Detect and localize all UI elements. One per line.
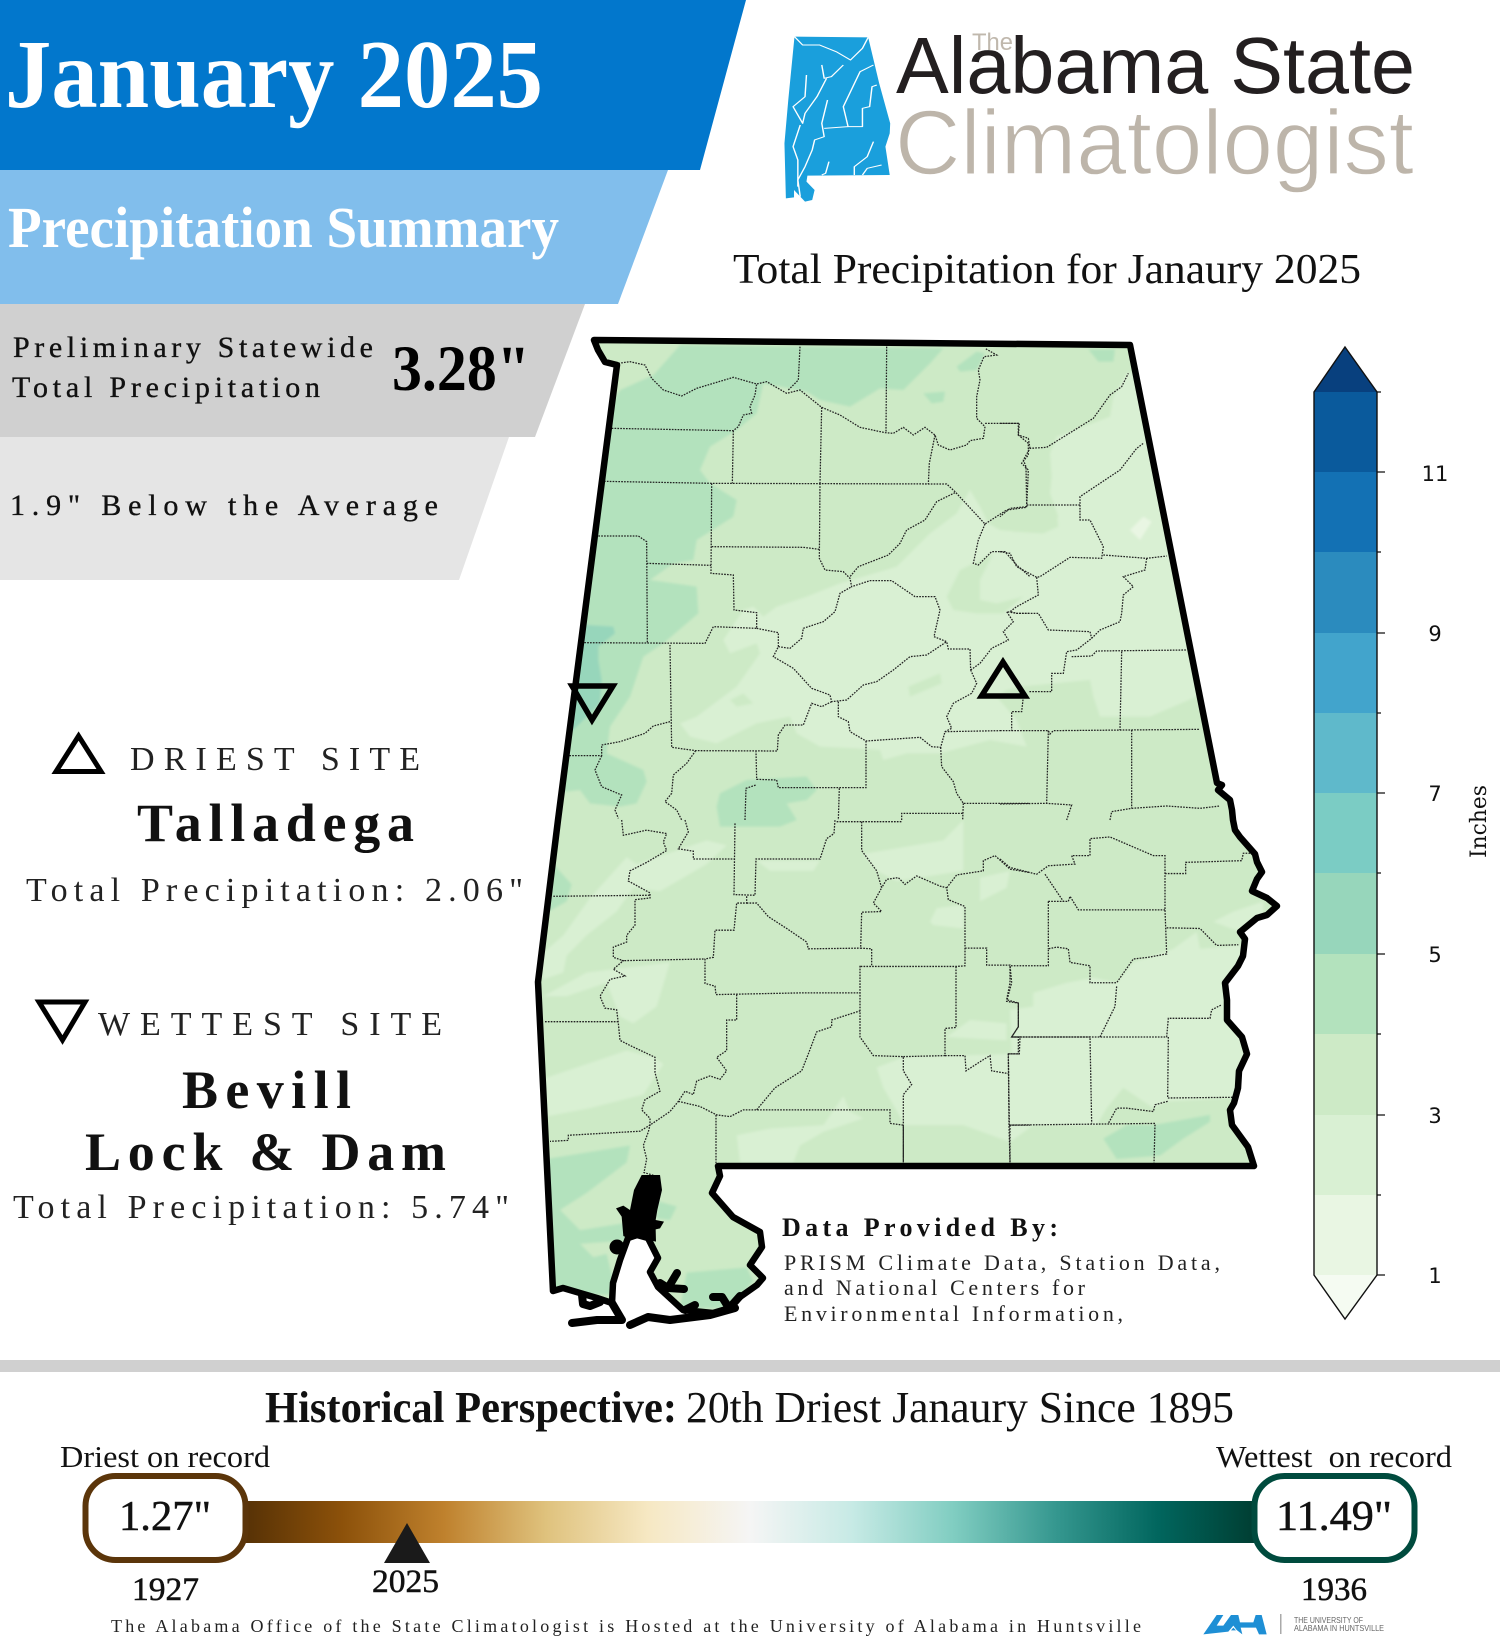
UAH mark	[1203, 1615, 1267, 1634]
colorbar tick labels: 1	[1428, 1264, 1442, 1288]
data sources text: Environmental Information,	[784, 1301, 1123, 1326]
2025 label: 2025	[372, 1564, 439, 1600]
driest site name: Talladega	[137, 793, 414, 853]
data sources heading: Data Provided By:	[782, 1213, 1058, 1242]
colorbar tick labels	[1422, 462, 1448, 1288]
wettest value: 11.49"	[1276, 1494, 1392, 1540]
precipitation contours	[530, 345, 1270, 1308]
statewide label	[12, 331, 373, 404]
data sources text	[784, 1250, 1220, 1326]
UAH wordmark: THE UNIVERSITY OF	[1294, 1616, 1363, 1625]
driest site value: Total Precipitation: 2.06"	[26, 872, 523, 909]
panel: header bands	[0, 0, 746, 580]
1936 label: 1936	[1301, 1572, 1367, 1608]
logo text: The: The	[972, 29, 1013, 56]
logo	[784, 21, 1415, 202]
wettest record label: Wettest on record	[1216, 1439, 1453, 1474]
colorbar tick labels: 5	[1428, 943, 1442, 967]
below average text: 1.9" Below the Average	[10, 489, 438, 522]
logo icon: Alabama rivers	[784, 37, 890, 202]
wettest box	[1254, 1476, 1414, 1560]
county boundaries	[545, 347, 1250, 1175]
driest record label: Driest on record	[60, 1439, 271, 1474]
Mobile Bay and Gulf coast	[572, 1175, 740, 1325]
driest box	[86, 1476, 246, 1560]
colorbar tick labels: 9	[1428, 622, 1442, 646]
coastal strokes	[572, 1273, 740, 1325]
logo text: Climatologist: Climatologist	[895, 92, 1414, 194]
gradient bar	[240, 1501, 1260, 1543]
colorbar unit label: Inches	[1467, 785, 1492, 858]
wettest site value: Total Precipitation: 5.74"	[13, 1189, 509, 1226]
colorbar segments	[1314, 347, 1377, 1319]
wettest site panel	[13, 1002, 509, 1226]
data sources	[782, 1213, 1220, 1326]
subtitle: Precipitation Summary	[8, 195, 559, 260]
below average band	[0, 437, 509, 580]
logo divider	[1280, 1614, 1282, 1634]
UAH logo	[1203, 1614, 1384, 1634]
historical perspective heading	[265, 1383, 1234, 1432]
driest site panel	[26, 736, 523, 909]
1927 label: 1927	[132, 1572, 199, 1608]
wettest site label: WETTEST SITE	[98, 1006, 442, 1043]
driest site marker	[982, 662, 1025, 696]
wettest site name: Lock & Dam	[85, 1122, 446, 1182]
wettest site name	[85, 1060, 446, 1182]
data sources text: PRISM Climate Data, Station Data,	[784, 1250, 1220, 1275]
wettest triangle icon	[39, 1002, 85, 1040]
subtitle band	[0, 170, 668, 304]
divider	[0, 1360, 1500, 1372]
upper Mobile Bay	[616, 1175, 664, 1242]
wettest site name: Bevill	[182, 1060, 351, 1120]
historical perspective heading: 20th Driest Janaury Since 1895	[686, 1383, 1234, 1432]
UAH wordmark	[1294, 1616, 1384, 1633]
footer text: The Alabama Office of the State Climatologist is Hosted at the University of Alabama in Huntsville	[111, 1616, 1141, 1636]
bay islet	[610, 1240, 624, 1254]
title: January 2025	[5, 21, 543, 129]
precipitation map of Alabama	[530, 340, 1277, 1325]
colorbar legend	[1314, 347, 1492, 1319]
statewide total band	[0, 304, 585, 437]
driest site label: DRIEST SITE	[130, 741, 420, 778]
driest triangle icon	[56, 736, 101, 772]
map title: Total Precipitation for Janaury 2025	[733, 247, 1361, 293]
colorbar tick labels: 3	[1428, 1104, 1442, 1128]
UAH wordmark: ALABAMA IN HUNTSVILLE	[1294, 1624, 1384, 1633]
logo text: Alabama State: Alabama State	[896, 21, 1415, 110]
data sources text: and National Centers for	[784, 1275, 1086, 1300]
map base fill	[538, 340, 1277, 1313]
historical perspective heading: Historical Perspective:	[265, 1383, 677, 1432]
driest value: 1.27"	[119, 1494, 211, 1540]
colorbar tick labels: 11	[1422, 462, 1448, 486]
colorbar ticks	[1377, 392, 1385, 1275]
state outline	[538, 340, 1277, 1313]
historical scale	[60, 1439, 1453, 1608]
statewide label: Preliminary Statewide	[13, 331, 373, 364]
wettest site marker	[572, 686, 613, 720]
colorbar tick labels: 7	[1428, 782, 1442, 806]
statewide value: 3.28"	[392, 333, 530, 405]
2025 marker	[384, 1523, 430, 1563]
statewide label: Total Precipitation	[12, 371, 320, 404]
title band	[0, 0, 746, 170]
